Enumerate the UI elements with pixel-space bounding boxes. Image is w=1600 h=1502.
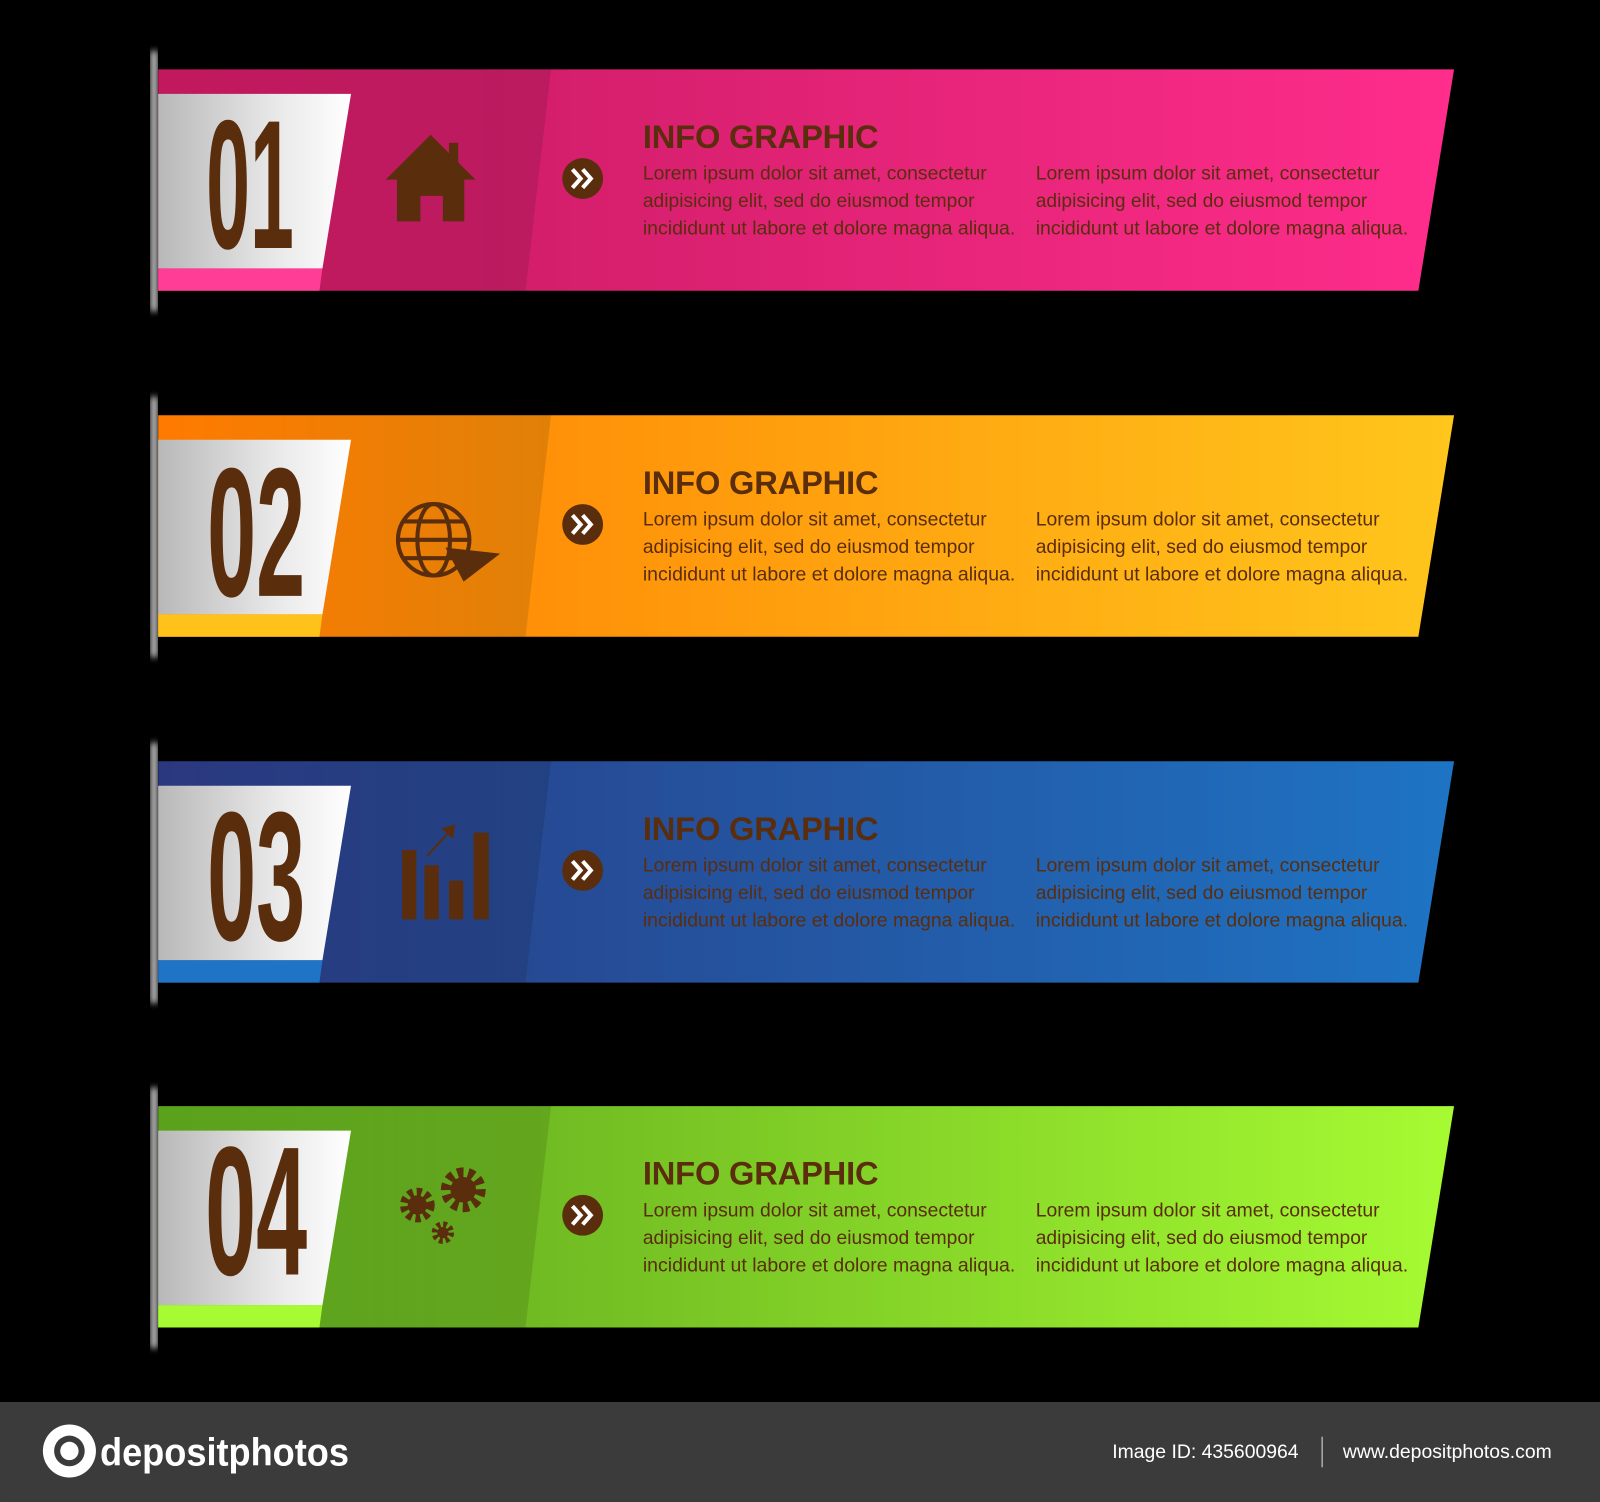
text block: adipisicing elit, sed do eiusmod tempor — [1036, 190, 1368, 212]
text block — [643, 1199, 1408, 1276]
footer — [0, 1402, 1600, 1502]
panel: banner 02 — [151, 397, 1454, 657]
text block: adipisicing elit, sed do eiusmod tempor — [643, 882, 975, 904]
title: INFO GRAPHIC — [643, 118, 879, 155]
text block: incididunt ut labore et dolore magna aliqua. — [1036, 1254, 1408, 1276]
text block: Lorem ipsum dolor sit amet, consectetur — [1036, 854, 1380, 876]
text block: adipisicing elit, sed do eiusmod tempor — [643, 190, 975, 212]
arrow circle — [562, 158, 603, 199]
text block: incididunt ut labore et dolore magna aliqua. — [643, 564, 1015, 586]
footer info: Image ID: 435600964 — [1112, 1441, 1299, 1463]
text block — [643, 854, 1408, 932]
logo — [43, 1424, 349, 1478]
footer info — [1112, 1437, 1552, 1467]
panel: banner 04 — [151, 1088, 1454, 1348]
text block: incididunt ut labore et dolore magna aliqua. — [643, 910, 1015, 932]
text block: adipisicing elit, sed do eiusmod tempor — [643, 1227, 975, 1249]
number tile 04 — [158, 1108, 351, 1313]
arrow circle — [562, 1195, 603, 1236]
text block: adipisicing elit, sed do eiusmod tempor — [1036, 536, 1368, 558]
icon: bar chart — [402, 824, 489, 919]
text block: incididunt ut labore et dolore magna aliqua. — [1036, 910, 1408, 932]
text block: Lorem ipsum dolor sit amet, consectetur — [643, 1199, 987, 1221]
number tile 01: 01 — [206, 82, 294, 287]
text block: Lorem ipsum dolor sit amet, consectetur — [643, 508, 987, 530]
number tile 04: 04 — [205, 1108, 307, 1313]
arrow circle — [562, 850, 603, 891]
text block: adipisicing elit, sed do eiusmod tempor — [643, 536, 975, 558]
title: INFO GRAPHIC — [643, 1155, 879, 1192]
panel: banner 01 — [151, 51, 1454, 311]
text block: incididunt ut labore et dolore magna aliqua. — [643, 1254, 1015, 1276]
number tile 02: 02 — [207, 430, 305, 635]
number tile 01 — [158, 82, 351, 287]
text block: incididunt ut labore et dolore magna aliqua. — [643, 218, 1015, 240]
text block: Lorem ipsum dolor sit amet, consectetur — [1036, 163, 1380, 185]
text block: incididunt ut labore et dolore magna aliqua. — [1036, 564, 1408, 586]
icon: globe — [398, 504, 495, 579]
text block — [643, 163, 1408, 240]
panel: banner 03 — [151, 743, 1454, 1003]
title: INFO GRAPHIC — [643, 464, 879, 501]
number tile 03 — [158, 774, 351, 979]
icon: house — [386, 135, 476, 221]
title: INFO GRAPHIC — [643, 810, 879, 847]
text block: Lorem ipsum dolor sit amet, consectetur — [1036, 508, 1380, 530]
arrow circle — [562, 504, 603, 545]
text block: Lorem ipsum dolor sit amet, consectetur — [643, 854, 987, 876]
logo: depositphotos — [100, 1431, 349, 1474]
text block: Lorem ipsum dolor sit amet, consectetur — [643, 163, 987, 185]
text block — [643, 508, 1408, 586]
icon: gears — [404, 1172, 481, 1241]
text block: adipisicing elit, sed do eiusmod tempor — [1036, 882, 1368, 904]
number tile 02 — [158, 430, 351, 635]
number tile 03: 03 — [207, 774, 305, 979]
text block: adipisicing elit, sed do eiusmod tempor — [1036, 1227, 1368, 1249]
text block: incididunt ut labore et dolore magna aliqua. — [1036, 218, 1408, 240]
footer info: www.depositphotos.com — [1342, 1441, 1552, 1463]
text block: Lorem ipsum dolor sit amet, consectetur — [1036, 1199, 1380, 1221]
